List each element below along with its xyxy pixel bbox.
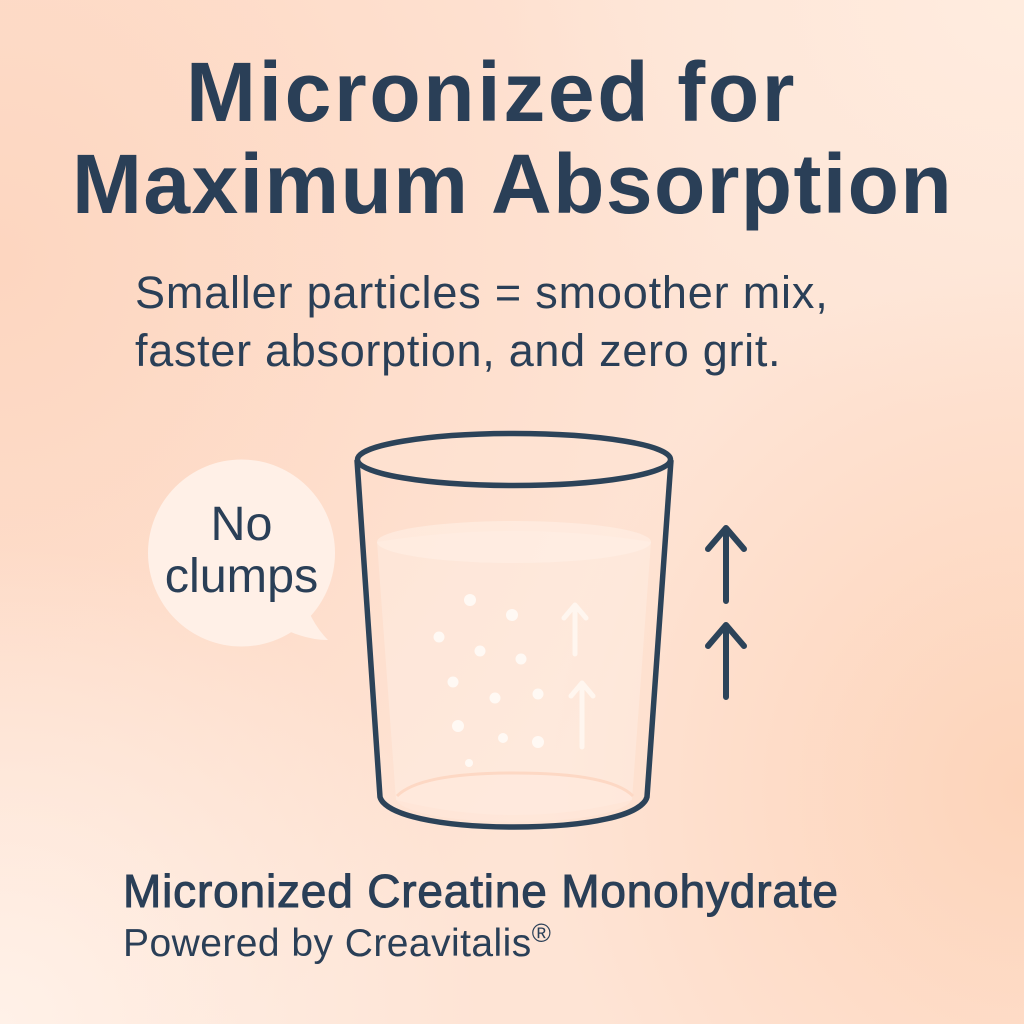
title: Maximum Absorption [72, 137, 953, 231]
title: Micronized for [186, 45, 797, 139]
product name text: Micronized Creatine Monohydrate [123, 865, 839, 917]
subtitle text: Smaller particles = smoother mix, [135, 267, 829, 318]
arrows inside glass [564, 605, 593, 747]
glass base ellipse [396, 773, 633, 822]
glass outline [357, 460, 671, 827]
subtitle text: faster absorption, and zero grit. [135, 325, 781, 376]
particles [434, 594, 544, 767]
water body [377, 531, 651, 815]
glass rim [358, 434, 670, 486]
water surface [377, 521, 651, 563]
brand line: Powered by Creavitalis® [123, 918, 551, 965]
subtitle text [135, 267, 829, 376]
title [72, 45, 953, 231]
speech bubble: no clumps: No [210, 497, 272, 551]
speech bubble: no clumps: clumps [165, 549, 318, 603]
speech bubble: no clumps [148, 460, 335, 646]
